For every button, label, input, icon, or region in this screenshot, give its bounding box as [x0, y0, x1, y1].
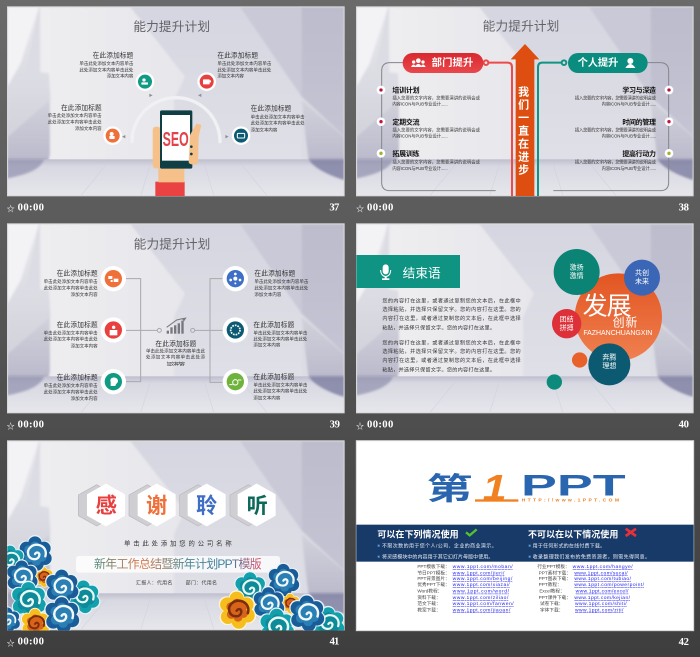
links: right column: www.1ppt.com/excel/ [576, 589, 629, 595]
text block: top left: 添加文本内容 [107, 73, 134, 80]
center arrow: 进 [518, 151, 529, 164]
center arrow: 们 [518, 98, 529, 112]
paragraph 1: 选择粘贴，并选择只保留文字。您的内容打在这里。您的 [382, 305, 521, 313]
links: right column: www.1ppt.com/ziti/ [575, 607, 624, 613]
text blocks: left: 此处添加文本内容单击此处 [44, 336, 98, 343]
text block: center: 处添加文本内容单击此处添 [146, 353, 205, 360]
links: left column: www.1ppt.com/jiaoan/ [453, 607, 511, 613]
hexagon word tiles: 聆 [196, 494, 217, 518]
company name: 单击此处添加您的公司名称 [124, 538, 232, 547]
text blocks: right: 在此添加标题 [253, 320, 295, 329]
icon: teal circle [136, 72, 154, 91]
text block: center [146, 339, 205, 367]
footer: timer: 00:00 [18, 637, 44, 648]
links: left column: 范文下载： [417, 600, 441, 607]
navy band: 可以在下列情况使用 [377, 528, 459, 539]
icon: orange [101, 266, 126, 291]
list: right: 时间的管理 [622, 117, 656, 126]
links: left column: PPT模板下载： [417, 563, 450, 570]
footer: page number: 37 [329, 202, 340, 213]
logo: 第 [427, 473, 473, 507]
icon: green [223, 369, 248, 394]
text block: top left [79, 50, 134, 80]
footer: timer: ☆ [7, 639, 15, 648]
footer: page number: 39 [330, 420, 340, 431]
list: right: 插入您要的文字内容，您需要演讲的说明会或 [575, 158, 657, 165]
links: right column: www.1ppt.com/hangye/ [573, 564, 633, 570]
list: right: 插入您要的文字内容，您需要演讲的说明会或 [575, 126, 657, 133]
text blocks: left: 添加文本内容 [71, 342, 98, 349]
paragraph 1: 内容打在这里，或者通过复制您的文本后，在此框中选择 [382, 314, 521, 322]
text blocks: left: 添加文本内容 [71, 291, 98, 298]
navy band: 将灵感模块中的内容用于其它幻灯片母版中使用。 [382, 554, 493, 561]
links: right column: www.1ppt.com/shiti/ [575, 601, 627, 607]
bubble: main development: 发展 [583, 292, 632, 320]
center arrow: 我 [518, 84, 529, 98]
text blocks: right: 此处添加文本内容单击此处 [253, 388, 308, 395]
links: right column [537, 563, 645, 613]
text block: top left: 单击此处添加文本内容单击 [79, 60, 134, 67]
icon: dark teal circle [232, 126, 250, 145]
slide background [356, 7, 693, 196]
links: left column [417, 563, 514, 613]
navy band [356, 525, 694, 562]
footer: timer: ☆ [7, 205, 15, 214]
bubble: dark teal: 奔腾 [602, 352, 616, 361]
footer: page number: 40 [679, 420, 689, 431]
panel: slide 42 1PPT notice [356, 441, 694, 648]
bubble: blue: 未来 [635, 277, 649, 286]
navy band: 不限次数的用于您个人/公司、企业的商业演示。 [382, 543, 497, 550]
text block: top right: 在此添加标题 [217, 51, 258, 60]
footer: timer: 00:00 [367, 203, 393, 214]
center arrow: 步 [518, 162, 529, 176]
bracket lines [382, 63, 669, 191]
small bubbles [547, 352, 587, 390]
text blocks: left: 在此添加标题 [57, 320, 98, 329]
icon: blue [223, 266, 248, 291]
bubble: dark teal [588, 343, 630, 385]
logo: 1 [483, 466, 507, 508]
center arrow: 在 [518, 137, 529, 151]
text block: lower right: 单击此处添加文本内容单击 [251, 113, 305, 120]
navy band: 不可以在以下情况使用 [528, 528, 618, 539]
center arrow [511, 44, 539, 196]
icon: teal [101, 369, 126, 394]
text block: center: 在此添加标题 [155, 339, 197, 348]
footer: timer: 00:00 [367, 420, 393, 431]
links: left column: 节日PPT模板： [417, 569, 450, 576]
text blocks: right: 单击此处添加文本内容单击 [253, 329, 308, 336]
text block: lower left: 在此添加标题 [61, 103, 102, 112]
links: right column: PPT课件下载： [539, 594, 571, 601]
icon: orange circle [103, 126, 122, 145]
links: right column: 行业PPT模板： [537, 563, 570, 570]
links: left column: 资料下载： [417, 594, 441, 601]
heading: 能力提升计划 [133, 19, 210, 34]
list: left [392, 85, 481, 172]
bubble: blue [624, 260, 660, 296]
center arrow: 直 [518, 124, 529, 138]
links: left column: 优秀PPT下载： [417, 581, 450, 588]
list: left: 培训计划 [392, 85, 420, 94]
list: right: 内容ICON与PUB专业设计...... [602, 100, 656, 107]
text blocks: right [253, 269, 309, 401]
paragraph 2: 粘贴，并选择只保留文字。您的内容打在这里。 [382, 365, 495, 373]
bubble: teal: 激情 [570, 271, 584, 280]
text block: top right: 添加文本内容 [217, 73, 244, 80]
pill: department [403, 53, 483, 73]
text blocks: right: 在此添加标题 [254, 269, 296, 278]
bullets [377, 86, 673, 158]
hexagon word tiles: 谢 [146, 494, 167, 518]
text blocks: right: 添加文本内容 [253, 394, 281, 401]
hexagon word tiles [78, 484, 275, 526]
slide background [356, 224, 693, 413]
decoration: right clouds [218, 562, 344, 630]
text block: top right: 单击此处添加文本内容单击 [217, 60, 272, 67]
footer: timer: ☆ [356, 205, 364, 214]
text block: top left: 在此添加标题 [93, 50, 134, 59]
list: left: 插入您要的文字内容，您需要演讲的说明会或 [392, 158, 481, 165]
footer: timer: 00:00 [18, 203, 44, 214]
footer: page number: 38 [679, 202, 689, 213]
navy band: 用于任何形式的在线付费下载。 [533, 543, 605, 550]
links: left column: www.1ppt.com/word/ [453, 589, 510, 595]
text block: top left: 此处添加文本内容单击此处 [79, 66, 134, 73]
list: right: 插入您要的文字内容，您需要演讲的说明会或 [575, 94, 657, 101]
heading: 能力提升计划 [483, 19, 559, 34]
paragraph 2: 内容打在这里，或者通过复制您的文本后，在此框中选择 [382, 356, 521, 364]
logo [427, 466, 626, 508]
links: left column: www.1ppt.com/fanwen/ [453, 601, 514, 607]
bubble: red: 团结 [560, 314, 574, 323]
footer: page number: 41 [330, 637, 339, 648]
paragraph 2: 选择粘贴，并选择只保留文字。您的内容打在这里。您的 [382, 347, 521, 355]
arc around phone [132, 98, 220, 142]
panel: slide 39 six items [7, 224, 344, 431]
subtitle bar: 新年工作总结暨新年计划PPT模版 [94, 556, 262, 571]
bubble: red [552, 309, 581, 338]
bubble: red: 拼搏 [560, 323, 574, 332]
icon: red circle [197, 72, 216, 91]
links: left column: www.1ppt.com/beijing/ [453, 576, 513, 582]
list: right: 内容ICON与PUB专业设计...... [602, 132, 656, 139]
list: right: 内容ICON与PUB专业设计...... [602, 165, 656, 172]
panel: slide 38 progress arrow [356, 7, 693, 214]
list: right: 提高行动力 [622, 149, 656, 158]
paragraph 2 [382, 338, 521, 373]
text blocks: left: 单击此处添加文本内容单击 [44, 382, 98, 389]
bubble: blue: 共创 [635, 268, 649, 277]
links: left column: Word教程： [417, 588, 442, 595]
links: right column: 字体下载： [540, 606, 563, 613]
text block: lower left [48, 103, 102, 132]
slide background [7, 224, 344, 413]
text blocks: left: 此处添加文本内容单击此处 [44, 284, 98, 291]
list: right: 学习与深造 [622, 85, 656, 94]
text block: lower left: 单击此处添加文本内容单击 [48, 112, 102, 119]
footer: timer [356, 420, 393, 431]
slide background [7, 7, 344, 196]
links: right column: www.1ppt.com/tubiao/ [574, 576, 632, 582]
bubble: teal [554, 249, 600, 295]
connector lines [126, 279, 223, 382]
paragraph 1 [382, 296, 521, 331]
links: left column: www.1ppt.com/xiazai/ [453, 582, 510, 588]
list: left: 插入您要的文字内容，您需要演讲的说明会或 [392, 126, 481, 133]
pill: personal: 个人提升 [578, 56, 618, 69]
text blocks: right: 此处添加文本内容单击此处 [253, 336, 308, 343]
links: right column: www.1ppt.com/powerpoint/ [574, 582, 645, 588]
text block: top right [217, 51, 272, 80]
logo: HTTP://www.1PPT.COM [522, 498, 619, 504]
paragraph 1: 您的内容打在这里，或者通过复制您的文本后，在此框中 [382, 296, 521, 304]
connector: red [484, 60, 512, 196]
list: left: 内容ICON与PUB专业设计...... [392, 132, 448, 139]
list: left: 内容ICON与PUB专业设计...... [392, 100, 448, 107]
slide background [7, 441, 344, 630]
footer: page number: 42 [679, 637, 689, 648]
paragraph 1: 粘贴，并选择只保留文字。您的内容打在这里。 [382, 323, 495, 331]
footer: timer: ☆ [356, 422, 364, 431]
panel: slide 40 closing words [356, 224, 693, 431]
list: left: 插入您要的文字内容，您需要演讲的说明会或 [392, 94, 481, 101]
text block: lower right: 添加文本内容 [251, 126, 278, 133]
links: left column: www.1ppt.com/jieri/ [453, 570, 505, 576]
text blocks: right: 在此添加标题 [253, 372, 295, 381]
phone in hand: SEO [163, 128, 189, 151]
bubble: dark teal: 理想 [602, 361, 616, 370]
banner: 结束语 [403, 266, 441, 280]
footer: timer [7, 420, 44, 431]
text blocks: right: 添加文本内容 [253, 342, 281, 349]
presenter info: 汇报人：代用名 [136, 579, 172, 586]
icon: bar chart [167, 317, 187, 334]
list: right [575, 85, 657, 172]
hexagon word tiles: 听 [247, 494, 268, 518]
bubble: main development: 创新 [613, 315, 637, 330]
text blocks: left: 在此添加标题 [57, 269, 98, 278]
text block: center: 加文本内容 [167, 360, 185, 367]
links: left column: www.1ppt.com/moban/ [453, 564, 513, 570]
footer: timer: 00:00 [18, 420, 44, 431]
paragraph 2: 您的内容打在这里，或者通过复制您的文本后，在此框中 [382, 338, 521, 346]
text blocks: left [44, 269, 98, 402]
list: left: 拓展训练 [392, 149, 420, 158]
text blocks: right: 单击此处添加文本内容单击 [253, 381, 308, 388]
heading: 能力提升计划 [134, 236, 210, 251]
list: left: 内容ICON与PUB专业设计...... [392, 165, 448, 172]
text blocks: left: 单击此处添加文本内容单击 [44, 329, 98, 336]
bubble: teal: 激扬 [570, 263, 584, 272]
bubble: main development [575, 273, 662, 361]
arrows [122, 94, 229, 138]
icon: red [101, 317, 126, 343]
text block: lower left: 此处添加文本内容单击此处 [48, 118, 102, 125]
text blocks: left: 此处添加文本内容单击此处 [44, 388, 98, 395]
text blocks: left: 在此添加标题 [57, 373, 98, 382]
center arrow: 一 [518, 113, 529, 125]
icon: dark teal [223, 317, 248, 343]
bubble: main development: FAZHANCHUANGXIN [583, 330, 652, 337]
subtitle bar [76, 556, 280, 573]
hexagon word tiles: 感 [96, 493, 117, 518]
presenter info: 部门：代用名 [186, 579, 217, 586]
text block: lower left: 添加文本内容 [75, 125, 102, 132]
text blocks: left: 添加文本内容 [71, 395, 98, 402]
links: right column: PPT素材下载： [539, 569, 571, 576]
text block: lower right: 在此添加标题 [251, 104, 292, 113]
panel: slide 37 SEO phone [7, 7, 344, 214]
text block: lower right [251, 104, 305, 133]
white slide [356, 441, 694, 631]
links: right column: PPT教程： [539, 581, 562, 588]
pill: personal [568, 53, 648, 73]
navy band: 收录整理我们发布的免费资源者，则需先得同意。 [533, 554, 650, 561]
links: right column: 试卷下载： [540, 600, 563, 607]
footer: timer: ☆ [7, 422, 15, 431]
text block: top right: 此处添加文本内容单击此处 [217, 66, 272, 73]
list: left: 定期交流 [392, 117, 420, 126]
text blocks: left: 单击此处添加文本内容单击 [44, 278, 98, 285]
decoration: left clouds [7, 535, 100, 630]
presenter info [136, 579, 217, 586]
links: right column: www.1ppt.com/kejian/ [574, 595, 631, 601]
connector: teal [538, 60, 566, 196]
links: left column: PPT背景图片： [417, 575, 450, 582]
pill: department: 部门提升 [432, 56, 473, 69]
logo: PPT [521, 470, 626, 503]
text blocks: right: 此处添加文本内容单击此处 [254, 284, 309, 291]
links: right column: Excel教程： [539, 588, 565, 595]
footer: timer [7, 637, 44, 648]
phone in hand [153, 110, 201, 196]
text blocks: right: 单击此处添加文本内容单击 [254, 278, 309, 285]
panel: slide 41 thanks [0, 441, 345, 648]
text block: center: 单击此处添加文本内容单击此 [146, 347, 205, 354]
text block: lower right: 此处添加文本内容单击此处 [251, 120, 305, 127]
banner [356, 255, 460, 288]
links: left column: www.1ppt.com/ziliao/ [453, 595, 509, 601]
links: right column: PPT图表下载： [539, 575, 571, 582]
links: left column: 教案下载： [417, 606, 441, 613]
links: right column: www.1ppt.com/sucai/ [574, 570, 628, 576]
text blocks: right: 添加文本内容 [254, 291, 282, 298]
